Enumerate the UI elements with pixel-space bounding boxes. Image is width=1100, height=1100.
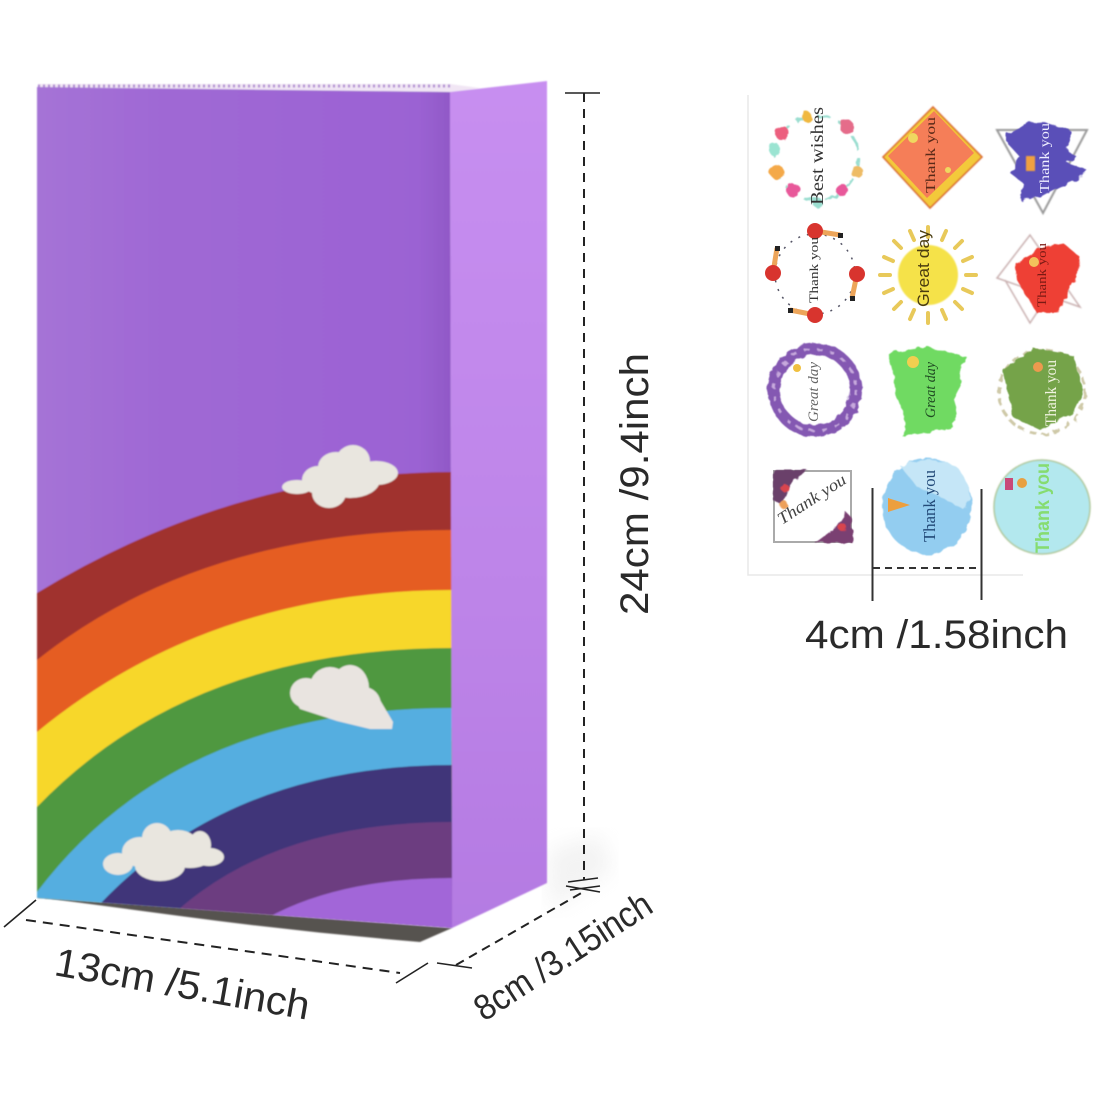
cloud top [282,445,398,508]
serrated top edge [38,84,480,93]
rainbow [37,472,453,940]
cloud middle [290,665,393,729]
sticker: olive blob [999,348,1085,434]
sticker: olive blob: Thank you [1043,360,1060,426]
sticker: floral frame: Thank you [774,470,850,528]
sticker: orange diamond: Thank you [924,117,939,193]
sticker: red dots ring: Thank you [806,236,821,303]
sticker: green blob: Great day [923,362,939,418]
sticker: sun great day: Great day [914,229,933,307]
bag side panel [450,81,547,928]
sticker: cyan circle: Thank you [1033,463,1054,553]
sticker: best wishes: Best wishes [807,107,827,205]
sticker: floral frame [773,470,852,543]
bag shadow [37,835,612,942]
sticker: red blob: Thank you [1034,242,1049,307]
sticker: purple wreath [774,349,856,431]
dimension: width 13cm: 13cm /5.1inch [51,941,313,1029]
sticker: sun great day [880,227,976,323]
dimension: depth 8cm: 8cm /3.15inch [466,883,659,1029]
sticker: orange diamond [883,107,982,208]
sticker: purple blob: Thank you [1038,123,1053,193]
sticker: green blob [888,347,967,437]
dimension: height 24cm [565,93,657,890]
cloud bottom [103,823,224,881]
paper bag [37,81,547,940]
sticker: red dots ring [765,223,865,323]
dimension: height 24cm: 24cm /9.4inch [613,353,657,615]
sticker: purple blob [997,122,1087,213]
dimension: sticker 4cm [805,488,1068,657]
sticker: red blob [997,235,1080,323]
sticker: purple wreath: Great day [806,362,822,422]
sticker: cyan circle [994,460,1090,554]
dimension: width 13cm [4,900,428,1029]
bag front panel [37,87,452,928]
sticker: best wishes [769,107,863,208]
sticker sheet [748,95,1090,575]
sticker: blue circle [882,458,972,554]
dimension: sticker 4cm: 4cm /1.58inch [805,613,1068,657]
sticker: blue circle: Thank you [920,470,939,542]
